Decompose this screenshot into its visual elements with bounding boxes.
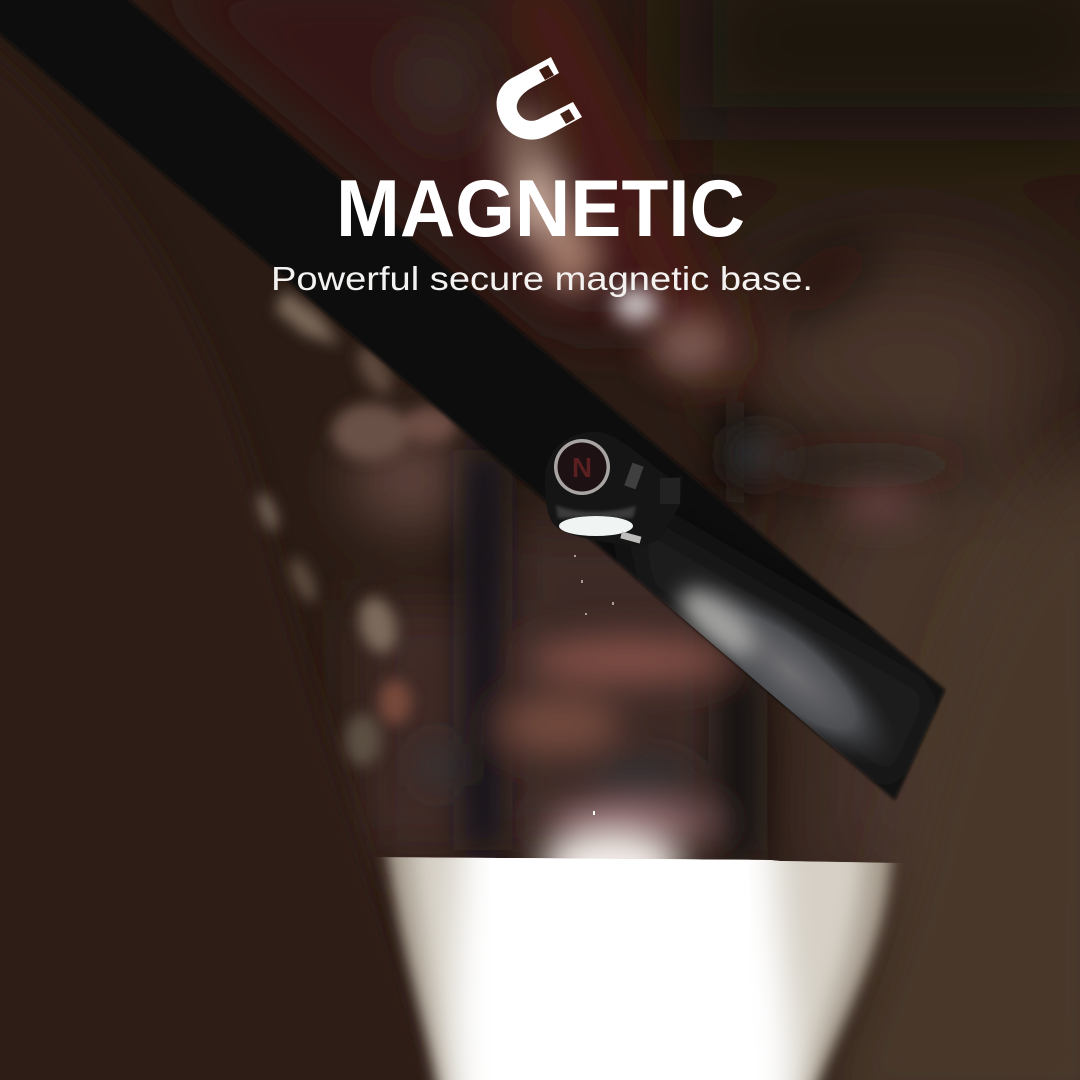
lamp light glow above the surface	[542, 828, 682, 900]
lamp light glow surface	[378, 857, 900, 1080]
foreground right silhouette	[815, 420, 1080, 1080]
dust specks in the light	[574, 555, 614, 815]
LED lens	[559, 516, 633, 536]
logo button: N	[572, 452, 592, 483]
bokeh highlights on the left	[255, 290, 456, 766]
magnetic flashlight device	[545, 432, 682, 546]
metal beam	[0, 0, 945, 800]
foreground left shoulder silhouette	[0, 30, 450, 1080]
icon: horseshoe magnet	[497, 57, 582, 140]
title: MAGNETIC	[336, 164, 745, 254]
subtitle: Powerful secure magnetic base.	[271, 260, 813, 297]
